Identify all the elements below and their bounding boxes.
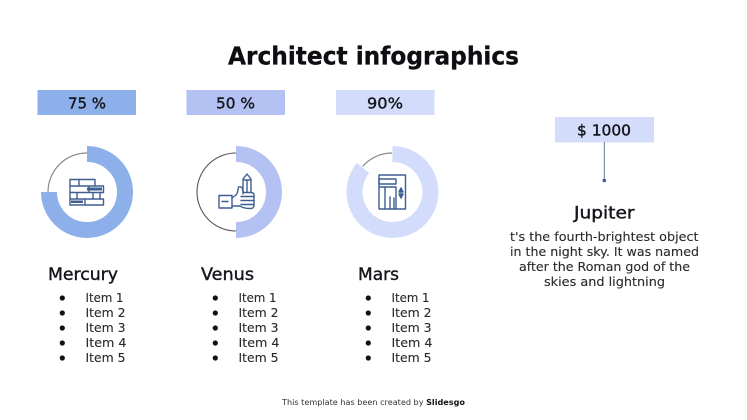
- value badge: 90%: 90%: [367, 94, 403, 112]
- value badge: 75 %: [38, 90, 136, 115]
- icon: hand holding pencil: [219, 174, 254, 208]
- donut chart: 90%: [354, 153, 430, 230]
- bullet list: Item 4: [392, 335, 433, 350]
- description text: [510, 229, 699, 289]
- bullet list: Item 4: [238, 335, 280, 350]
- panel: Jupiter: [510, 117, 699, 289]
- heading: Mars: Mars: [358, 265, 399, 284]
- bullet list: Item 4: [86, 335, 127, 350]
- panel: Mercury: [38, 90, 136, 365]
- panel: Mars: [336, 90, 434, 365]
- heading: Jupiter: Jupiter: [573, 204, 635, 222]
- bullet list: Item 5: [86, 350, 126, 365]
- connector line with dot: [602, 142, 606, 182]
- donut chart: 50%: [197, 153, 274, 231]
- bullet list: Item 3: [392, 320, 432, 335]
- value badge: 90%: [336, 90, 434, 115]
- value badge: $ 1000: $ 1000: [577, 122, 631, 140]
- bullet list: Item 2: [392, 305, 432, 320]
- bullet list: Item 2: [238, 305, 278, 320]
- bullet list: Item 5: [392, 350, 432, 365]
- value badge: 75 %: 75 %: [68, 94, 106, 112]
- bullet list: [213, 290, 280, 365]
- donut chart: 75%: [48, 153, 125, 230]
- bullet list: [60, 290, 127, 365]
- description text: in the night sky. It was named: [510, 244, 699, 259]
- heading: Mercury: Mercury: [48, 265, 118, 284]
- description text: skies and lightning: [544, 274, 665, 289]
- description text: t's the fourth-brightest object: [510, 229, 699, 244]
- value badge: 50 %: 50 %: [216, 94, 255, 112]
- bullet list: [366, 290, 433, 365]
- value badge: 50 %: [186, 90, 285, 115]
- bullet list: Item 5: [238, 350, 278, 365]
- heading: Venus: Venus: [201, 265, 254, 284]
- bullet list: Item 1: [238, 290, 276, 305]
- bullet list: Item 1: [86, 290, 124, 305]
- bullet list: Item 3: [238, 320, 278, 335]
- bullet list: Item 3: [86, 320, 126, 335]
- bullet list: Item 1: [392, 290, 430, 305]
- value badge: $ 1000: [555, 117, 654, 142]
- icon: elevator: [379, 175, 406, 209]
- panel: Venus: [186, 90, 285, 365]
- icon: brick wall: [70, 180, 104, 205]
- footer credit: This template has been created by Slidesgo: [281, 398, 466, 407]
- title: Architect infographics: [228, 42, 519, 70]
- description text: after the Roman god of the: [519, 259, 690, 274]
- bullet list: Item 2: [86, 305, 126, 320]
